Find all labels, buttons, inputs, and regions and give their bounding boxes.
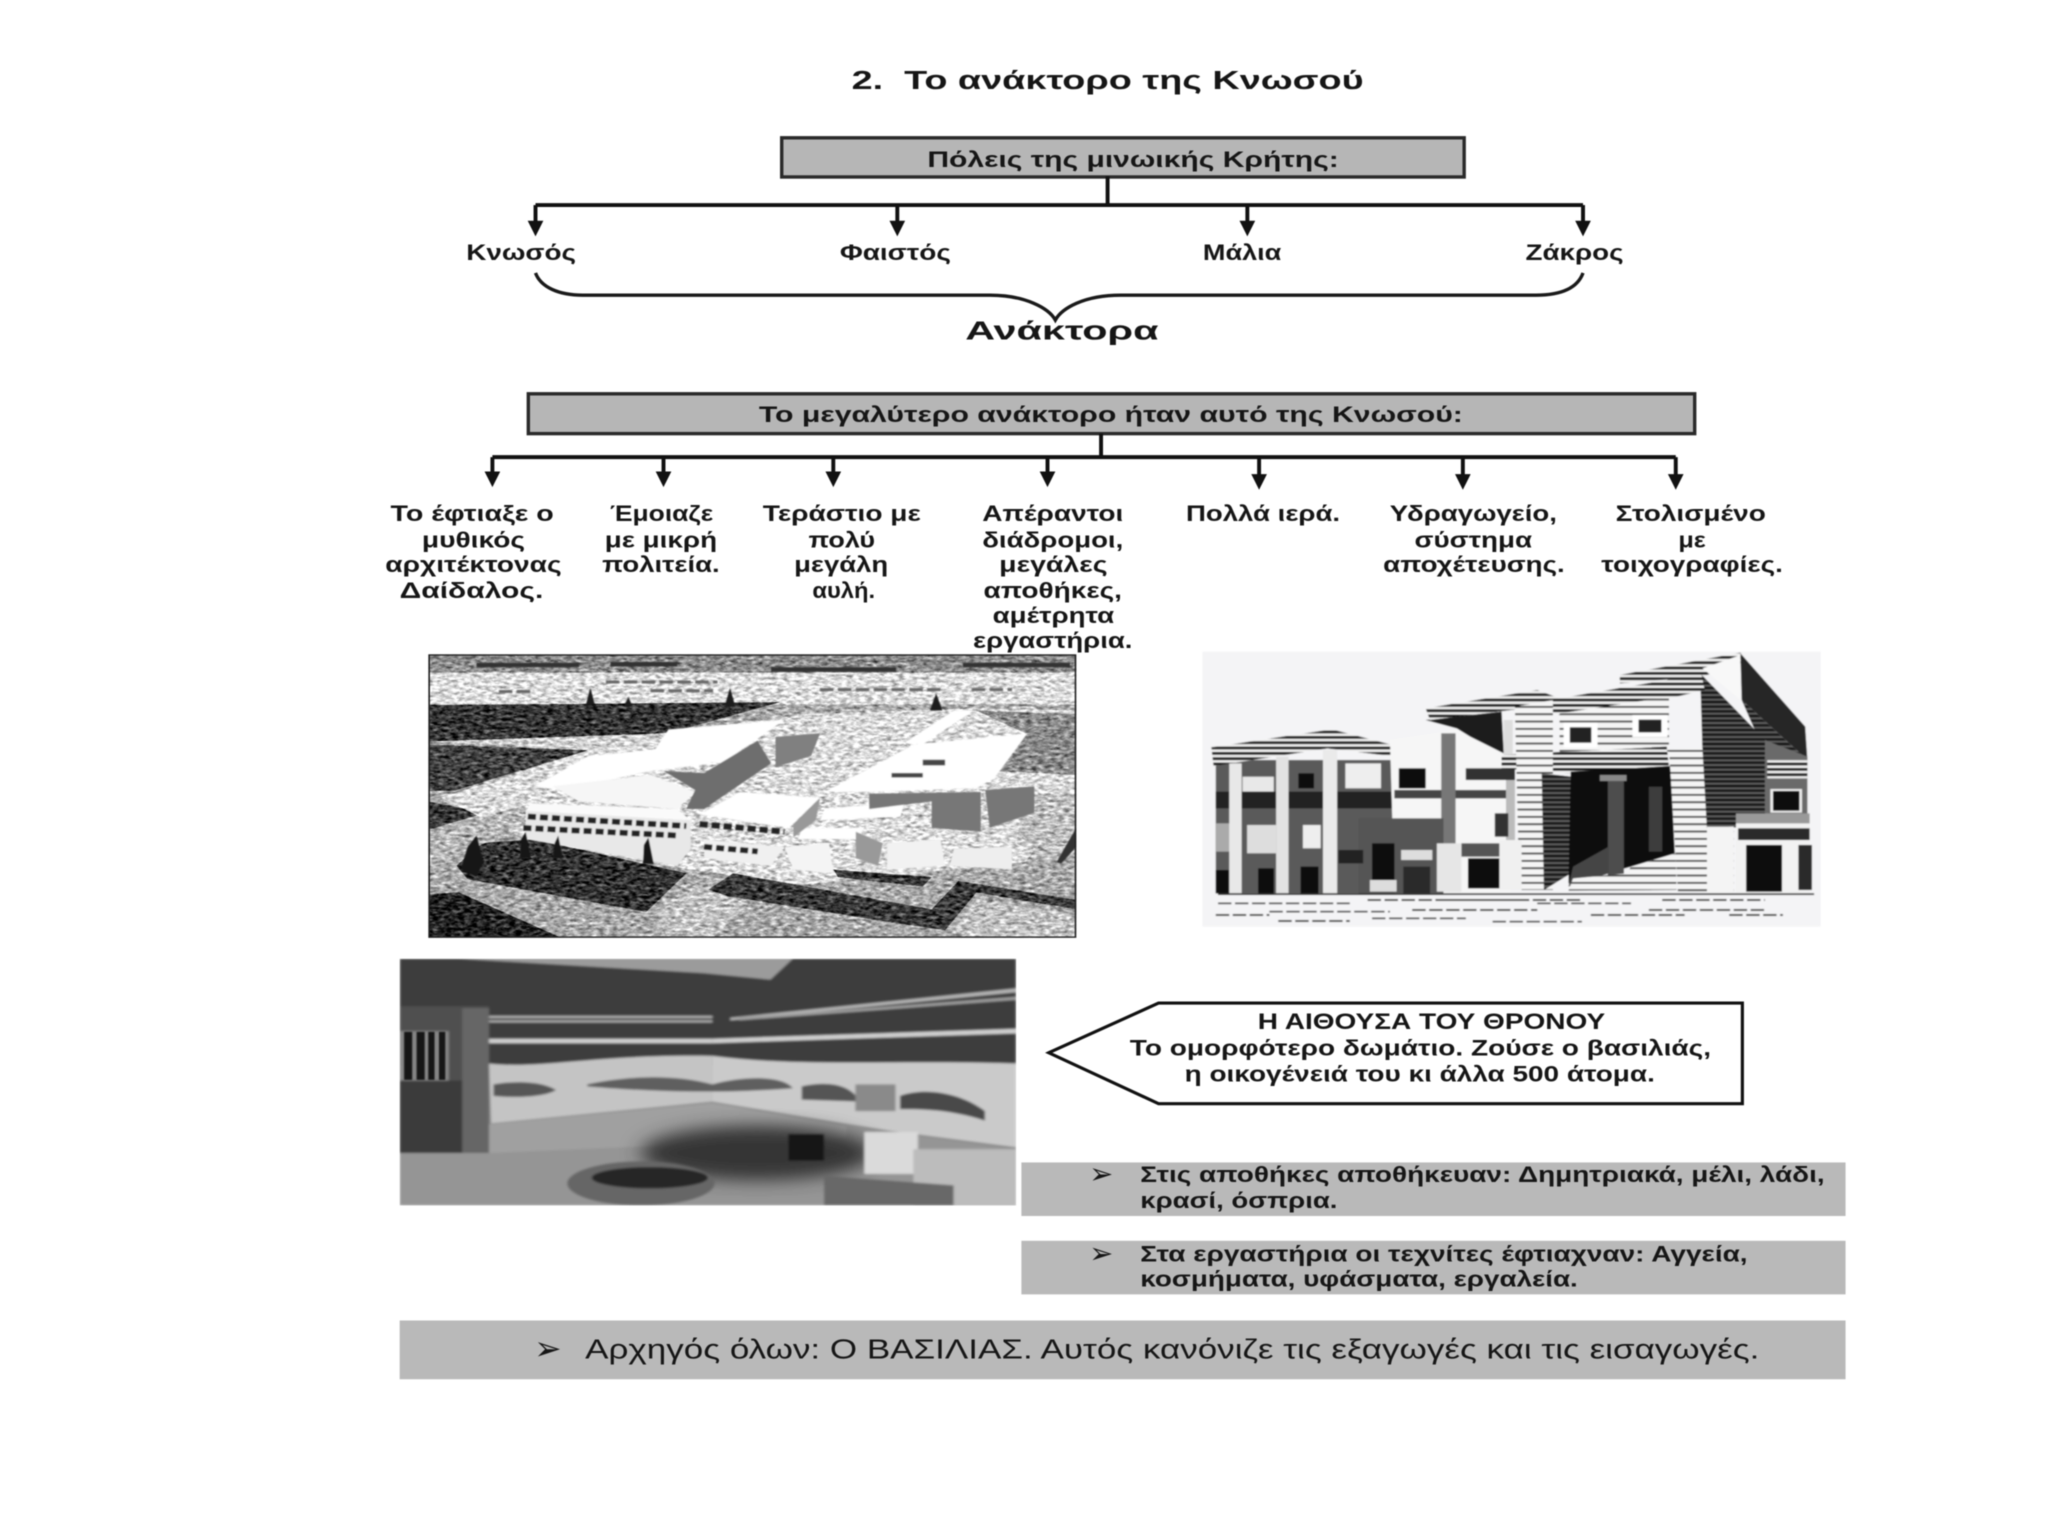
arrows: cities tree [536, 176, 1583, 225]
band: the king: Αρχηγός όλων: Ο ΒΑΣΙΛΙΑΣ. Αυτός κανόνιζε τις εξαγωγές και τις εισαγωγές. [585, 1333, 1759, 1364]
band: storerooms: ➢ [1089, 1158, 1113, 1190]
feature: water supply and drainage [1383, 501, 1565, 577]
feature: water supply and drainage: αποχέτευσης. [1383, 552, 1565, 577]
feature: huge courtyard [763, 501, 921, 603]
feature: small town [602, 501, 720, 577]
feature: corridors, storerooms, workshops: διάδρομοι, [982, 527, 1123, 552]
feature: corridors, storerooms, workshops: αποθήκες, [984, 578, 1122, 603]
right wing [1736, 815, 1810, 893]
main block [1620, 653, 1745, 683]
band: storerooms: κρασί, όσπρια. [1140, 1188, 1337, 1213]
band: workshops: κοσμήματα, υφάσματα, εργαλεία. [1140, 1267, 1578, 1292]
feature: water supply and drainage: Υδραγωγείο, [1390, 501, 1557, 526]
city labels: Κνωσός [466, 240, 576, 265]
feature: huge courtyard: πολύ [808, 527, 875, 552]
feature: architect Daedalus: Το έφτιαξε ο [391, 501, 554, 526]
band: workshops [1021, 1238, 1846, 1294]
arrows: palace features tree [492, 434, 1676, 478]
ground [1218, 893, 1814, 895]
feature: frescoes [1601, 501, 1783, 577]
image: photo of the throne room [400, 959, 1016, 1206]
feature: corridors, storerooms, workshops: εργαστήρια. [973, 628, 1132, 653]
box: largest palace: Το μεγαλύτερο ανάκτορο ήταν αυτό της Κνωσού: [759, 402, 1463, 427]
feature: small town: πολιτεία. [602, 552, 720, 577]
feature: architect Daedalus: μυθικός [422, 527, 525, 552]
label: palaces: Ανάκτορα [965, 318, 1159, 346]
box: cities of Minoan Crete: Πόλεις της μινωικής Κρήτης: [927, 147, 1339, 172]
feature: frescoes: τοιχογραφίες. [1601, 552, 1783, 577]
city labels: Ζάκρος [1526, 240, 1624, 265]
callout: throne room: Η ΑΙΘΟΥΣΑ ΤΟΥ ΘΡΟΝΟΥ [1258, 1009, 1605, 1034]
feature: small town: με μικρή [605, 527, 717, 552]
image: engraving of the palace facade [1202, 652, 1821, 927]
feature: architect Daedalus: αρχιτέκτονας [385, 552, 562, 577]
city labels: Μάλια [1203, 240, 1282, 265]
feature: huge courtyard: αυλή. [812, 578, 875, 603]
feature: water supply and drainage: σύστημα [1415, 527, 1533, 552]
band: storerooms: Στις αποθήκες αποθήκευαν: Δημητριακά, μέλι, λάδι, [1140, 1162, 1825, 1187]
feature: corridors, storerooms, workshops: Απέραντοι [982, 501, 1123, 526]
feature: frescoes: με [1678, 527, 1706, 552]
left wing [1216, 760, 1394, 893]
feature: many shrines: Πολλά ιερά. [1186, 501, 1340, 526]
brace [536, 273, 1583, 320]
middle section [1390, 720, 1510, 893]
band: storerooms [1021, 1158, 1846, 1216]
title: 2. Το ανάκτορο της Κνωσού [852, 67, 1364, 95]
feature: small town: Έμοιαζε [610, 501, 714, 526]
left door [400, 1006, 489, 1153]
feature: corridors, storerooms, workshops: αμέτρητα [993, 603, 1115, 628]
city labels: Φαιστός [840, 240, 951, 265]
callout: throne room: η οικογένειά του κι άλλα 500 άτομα. [1185, 1061, 1655, 1086]
box: cities of Minoan Crete [782, 138, 1464, 177]
city labels [466, 240, 1624, 265]
feature: corridors, storerooms, workshops: μεγάλες [999, 552, 1108, 577]
band: workshops: ➢ [1089, 1238, 1113, 1270]
fresco band [489, 1056, 712, 1123]
image: aerial engraving of the palace [428, 654, 1076, 938]
feature: frescoes: Στολισμένο [1616, 501, 1766, 526]
feature: corridors, storerooms, workshops [973, 501, 1132, 653]
feature: architect Daedalus: Δαίδαλος. [400, 578, 543, 603]
box: largest palace [528, 394, 1695, 434]
feature: architect Daedalus [385, 501, 562, 603]
callout: throne room [1049, 1003, 1742, 1104]
band: the king: ➢ [534, 1330, 562, 1367]
floor [400, 1102, 1016, 1206]
band: workshops: Στα εργαστήρια οι τεχνίτες έφτιαχναν: Αγγεία, [1140, 1242, 1748, 1267]
band: the king [400, 1320, 1846, 1379]
callout: throne room: Το ομορφότερο δωμάτιο. Ζούσε ο βασιλιάς, [1130, 1035, 1711, 1060]
feature: huge courtyard: μεγάλη [794, 552, 888, 577]
feature: huge courtyard: Τεράστιο με [763, 501, 921, 526]
